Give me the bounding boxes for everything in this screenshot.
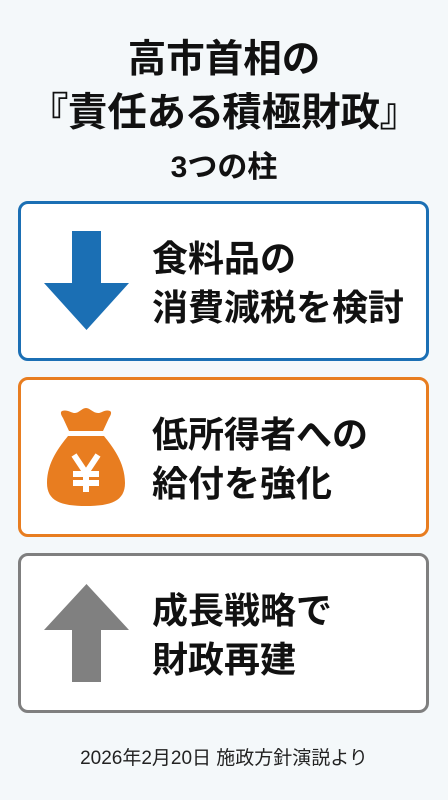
- panel: growth strategy: [18, 553, 429, 713]
- text: food tax: 食料品の: [152, 238, 296, 279]
- text: benefits: 給付を強化: [152, 463, 332, 504]
- subtitle: 3つの柱: [171, 151, 277, 184]
- text: food tax: 消費減税を検討: [152, 287, 404, 328]
- title line 1: 高市首相の: [128, 38, 320, 81]
- text: fiscal rebuild: [152, 590, 332, 680]
- panel: food tax cut: [18, 201, 429, 361]
- panel: low-income benefits: [18, 377, 429, 537]
- icon: up arrow: [44, 584, 129, 682]
- text: benefits: 低所得者への: [152, 414, 368, 455]
- text: fiscal rebuild: 財政再建: [152, 639, 296, 680]
- text: fiscal rebuild: 成長戦略で: [152, 590, 332, 631]
- text: benefits: [152, 414, 368, 504]
- icon: money bag: [47, 408, 125, 506]
- footer source: 2026年2月20日 施政方針演説より: [80, 748, 368, 769]
- title: [48, 38, 400, 135]
- title line 2: 『責任ある積極財政』: [48, 91, 400, 135]
- icon: down arrow: [44, 231, 129, 330]
- text: food tax: [152, 238, 404, 328]
